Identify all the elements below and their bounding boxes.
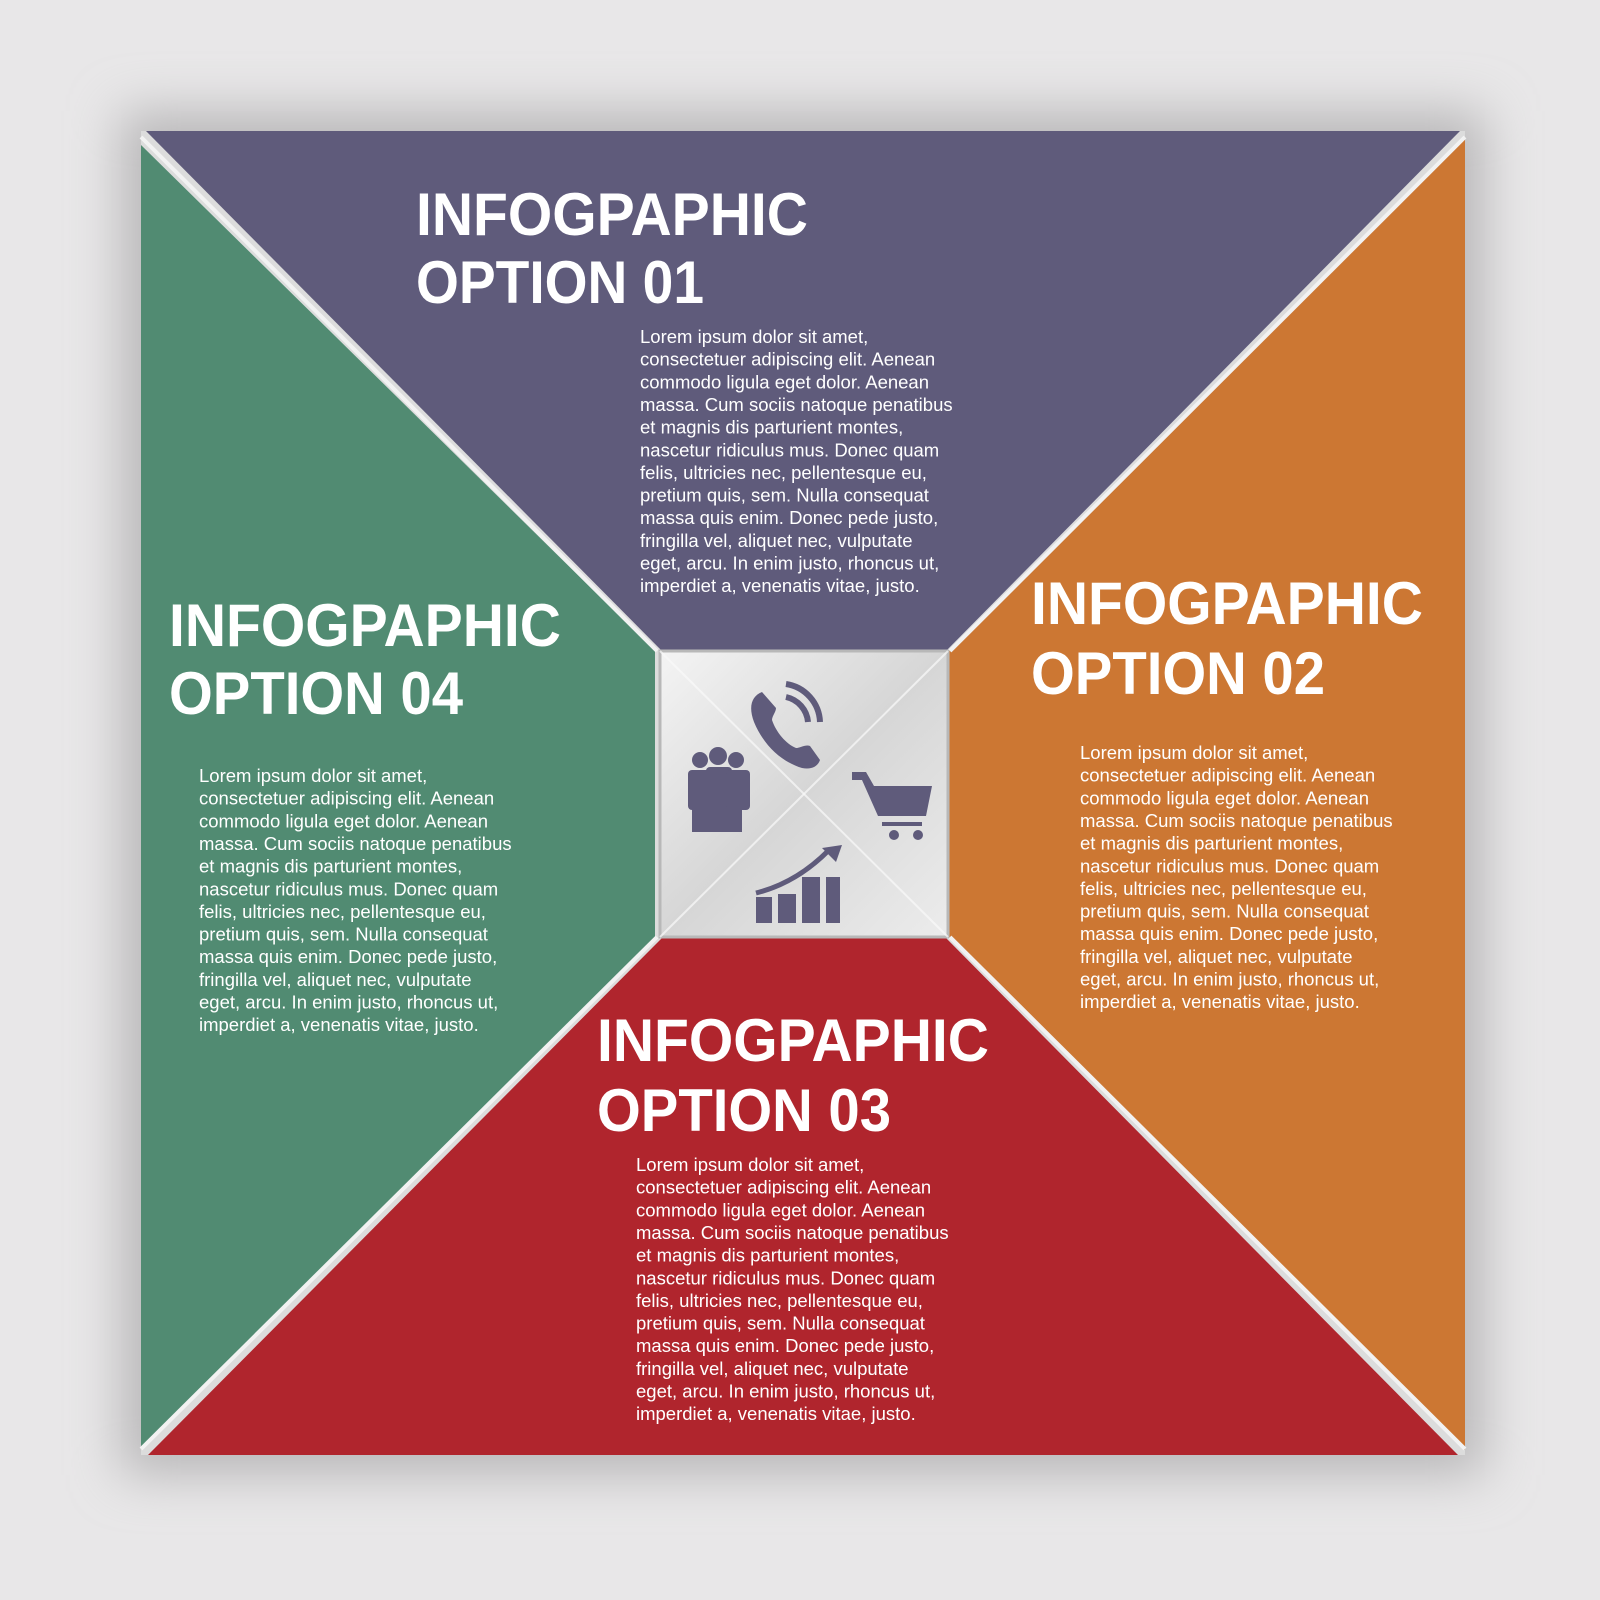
panel: option 02 (right) — [948, 138, 1465, 1450]
text block: option 04: fringilla vel, aliquet nec, vulputate — [199, 969, 472, 990]
text block: option 01: imperdiet a, venenatis vitae, justo. — [640, 575, 920, 596]
heading: option 02: INFOGPAPHIC — [1031, 570, 1423, 637]
icon: people — [688, 747, 750, 832]
text block: option 04: commodo ligula eget dolor. Aenean — [199, 810, 488, 831]
text block: option 04: massa quis enim. Donec pede justo, — [199, 946, 497, 967]
text block: option 02: massa. Cum sociis natoque penatibus — [1080, 810, 1393, 831]
text block: option 04: eget, arcu. In enim justo, rhoncus ut, — [199, 992, 498, 1012]
text block: option 04: et magnis dis parturient montes, — [199, 856, 462, 877]
heading: option 01 — [416, 181, 808, 316]
heading: option 03: OPTION 03 — [597, 1077, 891, 1144]
text block: option 03: fringilla vel, aliquet nec, vulputate — [636, 1358, 909, 1379]
heading: option 04 — [169, 592, 561, 727]
text block: option 03: et magnis dis parturient montes, — [636, 1245, 899, 1266]
icon: cart — [852, 772, 932, 840]
text block: option 04: pretium quis, sem. Nulla consequat — [199, 924, 488, 945]
text block: option 01: pretium quis, sem. Nulla consequat — [640, 485, 929, 506]
text block: option 02: imperdiet a, venenatis vitae, justo. — [1080, 991, 1360, 1012]
text block: option 01: Lorem ipsum dolor sit amet, — [640, 326, 868, 347]
text block: option 02: consectetuer adipiscing elit. Aenean — [1080, 765, 1375, 786]
panel: option 01 (top) — [146, 131, 1460, 651]
text block: option 01: nascetur ridiculus mus. Donec quam — [640, 439, 939, 460]
text block: option 02: massa quis enim. Donec pede justo, — [1080, 923, 1378, 944]
icon: growth chart — [756, 845, 842, 923]
icon: phone — [751, 684, 820, 769]
heading: option 01: INFOGPAPHIC — [416, 181, 808, 248]
panel: option 04 (left) — [141, 145, 655, 1448]
text block: option 01: massa. Cum sociis natoque penatibus — [640, 394, 953, 415]
text block: option 01: massa quis enim. Donec pede justo, — [640, 507, 938, 528]
text block: option 04: imperdiet a, venenatis vitae, justo. — [199, 1014, 479, 1035]
text block: option 03: pretium quis, sem. Nulla consequat — [636, 1313, 925, 1334]
text block: option 02: nascetur ridiculus mus. Donec quam — [1080, 855, 1379, 876]
text block: option 03: imperdiet a, venenatis vitae, justo. — [636, 1403, 916, 1424]
text block: option 02: felis, ultricies nec, pellentesque eu, — [1080, 878, 1367, 899]
text block: option 03: nascetur ridiculus mus. Donec quam — [636, 1267, 935, 1288]
center box — [660, 651, 948, 937]
text block: option 01: fringilla vel, aliquet nec, vulputate — [640, 530, 913, 551]
text block: option 03: Lorem ipsum dolor sit amet, — [636, 1154, 864, 1175]
text block: option 02: commodo ligula eget dolor. Aenean — [1080, 787, 1369, 808]
heading: option 02: OPTION 02 — [1031, 640, 1325, 707]
text block: option 03: massa quis enim. Donec pede justo, — [636, 1335, 934, 1356]
text block: option 04: Lorem ipsum dolor sit amet, — [199, 765, 427, 786]
text block: option 01: et magnis dis parturient montes, — [640, 417, 903, 438]
text block: option 04: consectetuer adipiscing elit. Aenean — [199, 788, 494, 809]
text block: option 02: et magnis dis parturient montes, — [1080, 833, 1343, 854]
text block: option 01: commodo ligula eget dolor. Aenean — [640, 371, 929, 392]
text block: option 02: Lorem ipsum dolor sit amet, — [1080, 742, 1308, 763]
heading: option 04: OPTION 04 — [169, 660, 464, 727]
heading: option 02 — [1031, 570, 1423, 707]
heading: option 03 — [597, 1007, 989, 1144]
text block: option 01: eget, arcu. In enim justo, rhoncus ut, — [640, 552, 939, 574]
heading: option 04: INFOGPAPHIC — [169, 592, 561, 659]
text block: option 03: commodo ligula eget dolor. Aenean — [636, 1199, 925, 1220]
text block: option 02: fringilla vel, aliquet nec, vulputate — [1080, 946, 1353, 967]
diagonal highlight lines — [141, 137, 1465, 1449]
text block: option 01: consectetuer adipiscing elit. Aenean — [640, 349, 935, 370]
text block: option 03: eget, arcu. In enim justo, rhoncus ut, — [636, 1380, 935, 1402]
heading: option 03: INFOGPAPHIC — [597, 1007, 989, 1074]
text block: option 04: nascetur ridiculus mus. Donec quam — [199, 878, 498, 899]
text block: option 03: felis, ultricies nec, pellentesque eu, — [636, 1290, 923, 1311]
text block: option 03: consectetuer adipiscing elit. Aenean — [636, 1177, 931, 1198]
heading: option 01: OPTION 01 — [416, 249, 704, 316]
text block: option 01: felis, ultricies nec, pellentesque eu, — [640, 462, 927, 483]
text block: option 02: pretium quis, sem. Nulla consequat — [1080, 901, 1369, 922]
text block: option 02: eget, arcu. In enim justo, rhoncus ut, — [1080, 968, 1379, 990]
text block: option 03: massa. Cum sociis natoque penatibus — [636, 1222, 949, 1243]
text block: option 04: massa. Cum sociis natoque penatibus — [199, 833, 512, 854]
panel: option 03 (bottom) — [148, 938, 1458, 1455]
text block: option 04: felis, ultricies nec, pellentesque eu, — [199, 901, 486, 922]
